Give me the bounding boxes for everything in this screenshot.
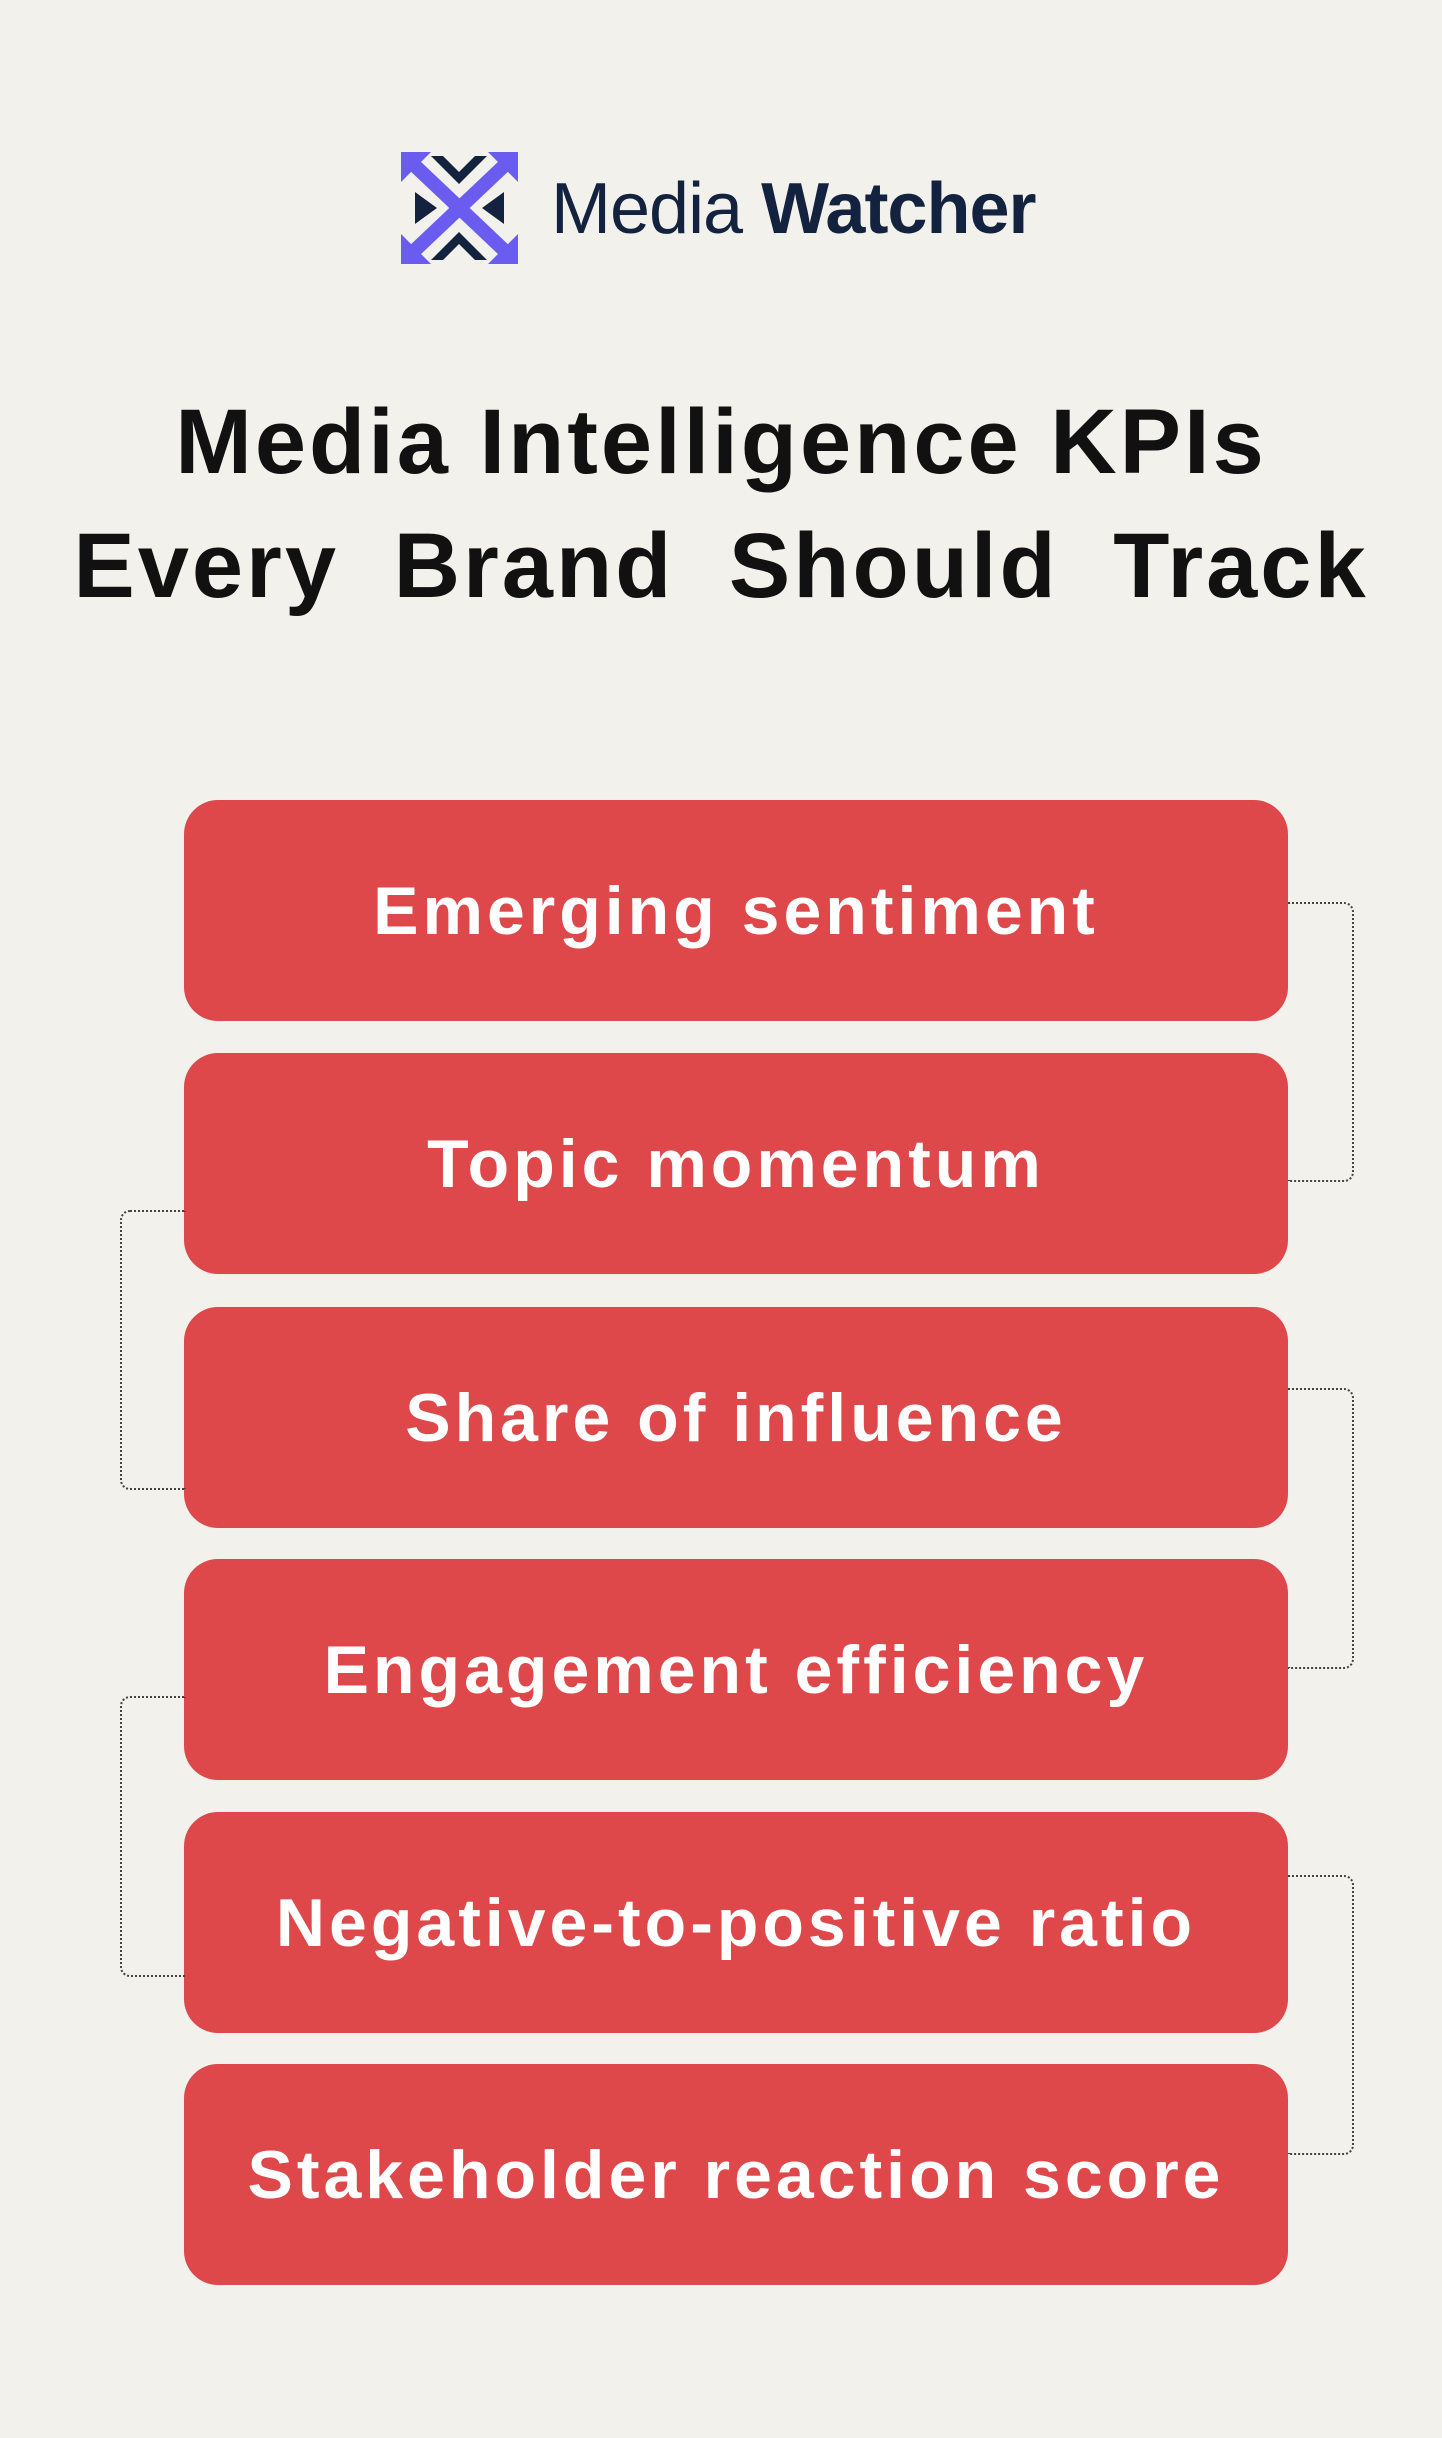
box 6 bbox=[184, 2064, 1288, 2285]
brand name: Media Watcher bbox=[551, 169, 1036, 249]
connector 2-3 bbox=[120, 1210, 186, 1490]
box 5: Negative-to-positive ratio bbox=[276, 1884, 1196, 1960]
icon: logo mark bbox=[401, 152, 518, 264]
connector 3-4 bbox=[1288, 1388, 1354, 1669]
box 4 bbox=[184, 1559, 1288, 1780]
connector 1-2 bbox=[1288, 902, 1354, 1182]
box 3: Share of influence bbox=[405, 1380, 1067, 1456]
box 2 bbox=[184, 1053, 1288, 1274]
box 4: Engagement efficiency bbox=[324, 1632, 1148, 1708]
box 1: Emerging sentiment bbox=[373, 872, 1099, 948]
title bbox=[73, 391, 1369, 617]
box 5 bbox=[184, 1812, 1288, 2033]
box 2: Topic momentum bbox=[427, 1126, 1045, 1202]
box 1 bbox=[184, 800, 1288, 1021]
title: Every Brand Should Track bbox=[73, 515, 1369, 617]
box 3 bbox=[184, 1307, 1288, 1528]
title: Media Intelligence KPIs bbox=[175, 391, 1267, 493]
logo bbox=[401, 152, 1036, 264]
connector 5-6 bbox=[1288, 1875, 1354, 2155]
box 6: Stakeholder reaction score bbox=[247, 2136, 1224, 2212]
connector 4-5 bbox=[120, 1696, 186, 1977]
